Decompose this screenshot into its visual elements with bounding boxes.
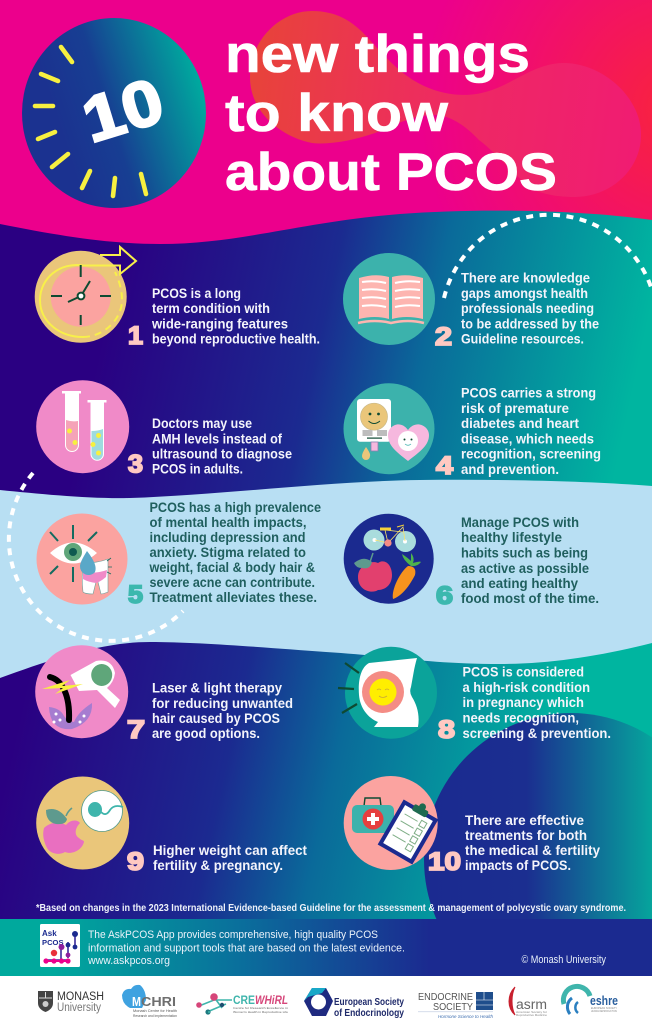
text 8: in pregnancy which	[462, 695, 584, 710]
main gradient background	[0, 211, 652, 925]
text 5: of mental health impacts,	[150, 515, 306, 530]
text 8: a high-risk condition	[462, 680, 590, 695]
text 2	[461, 271, 599, 346]
text 6: Manage PCOS with	[461, 515, 579, 530]
text 8: needs recognition,	[462, 710, 579, 726]
logo: CREWHIRL: Centre for Research Excellence in	[233, 1006, 288, 1010]
text 5: including depression and	[150, 530, 306, 545]
title: new things	[225, 25, 530, 84]
app logo: AskPCOS	[40, 924, 80, 967]
light blue band	[0, 480, 652, 678]
title	[225, 25, 557, 202]
text 7: for reducing unwanted	[152, 696, 293, 711]
text 8	[462, 665, 611, 741]
logo: MCHRI: Monash Centre for Health	[133, 1009, 177, 1013]
logo: ASRM	[509, 987, 548, 1017]
logo: MCHRI: CHRI	[141, 994, 176, 1009]
icon: clock with arrow	[35, 247, 136, 343]
logo: ESHRE: HUMAN REPRODUCTION	[591, 1009, 617, 1013]
text 10: treatments for both	[465, 828, 587, 843]
icon: apple and sperm	[36, 776, 129, 870]
text 2: professionals needing	[461, 301, 594, 316]
text 2: There are knowledge	[461, 271, 590, 286]
text 5: anxiety. Stigma related to	[150, 545, 306, 560]
header background	[0, 0, 652, 250]
logo: Monash University: University	[57, 1002, 101, 1014]
logo: ESHRE	[563, 986, 618, 1014]
logo: Monash University	[38, 991, 104, 1014]
text 9: Higher weight can affect	[153, 843, 308, 858]
text 9	[153, 843, 308, 873]
text 8: PCOS is considered	[462, 665, 584, 680]
text 4: recognition, screening	[461, 446, 601, 462]
icon: medical bag and clipboard	[344, 776, 442, 870]
badge: 10 clock: 10	[74, 64, 172, 156]
number 6: 6	[436, 582, 453, 610]
logo: MCHRI	[122, 985, 177, 1018]
icon: eye, tear and body	[36, 514, 128, 604]
text 6: and eating healthy	[461, 576, 579, 591]
text 1: beyond reproductive health.	[152, 332, 320, 346]
title: about PCOS	[225, 143, 557, 202]
text 6: food most of the time.	[461, 591, 599, 606]
text 1: PCOS is a long	[152, 286, 241, 301]
dashed arc upper right	[444, 215, 652, 298]
app logo: AskPCOS: Ask	[42, 929, 57, 938]
text 5: severe acne can contribute.	[150, 575, 315, 590]
text 6: healthy lifestyle	[461, 530, 562, 545]
logo: European Society of Endocrinology	[304, 988, 404, 1019]
text 4: disease, which needs	[461, 432, 594, 446]
icon: hair dryer laser	[35, 645, 128, 738]
text 6: as active as possible	[461, 561, 589, 576]
logo: CREWHIRL: CRE	[233, 993, 255, 1007]
text 9: fertility & pregnancy.	[153, 858, 283, 873]
text 5	[149, 500, 321, 605]
number 1: 1	[128, 322, 143, 350]
number 3: 3	[128, 451, 143, 479]
number 2: 2	[435, 323, 452, 351]
text 1: wide-ranging features	[151, 316, 288, 332]
logo: European Society of Endocrinology: of Endocrinology	[334, 1007, 404, 1019]
text 10: impacts of PCOS.	[465, 858, 571, 873]
text 3: PCOS in adults.	[152, 462, 243, 476]
copyright: © Monash University	[522, 954, 607, 966]
text 7: hair caused by PCOS	[152, 711, 280, 726]
logo: ASRM: Reproductive Medicine	[516, 1013, 548, 1017]
text 3: AMH levels instead of	[152, 432, 283, 446]
logo: MCHRI: M	[132, 994, 141, 1009]
number 8: 8	[438, 716, 455, 744]
text 4: diabetes and heart	[461, 416, 580, 431]
icon: test tubes	[36, 380, 129, 473]
text 5: weight, facial & body hair &	[149, 560, 315, 575]
logo: European Society of Endocrinology: European Society	[334, 996, 404, 1008]
text 8: screening & prevention.	[462, 726, 611, 741]
text 5: Treatment alleviates these.	[150, 590, 317, 605]
text 4: risk of premature	[461, 401, 569, 416]
text 6: habits such as being	[461, 546, 588, 560]
logo strip background	[0, 976, 652, 1024]
icon: book	[343, 253, 435, 345]
text 2: to be addressed by the	[461, 316, 599, 332]
text 10: the medical & fertility	[465, 843, 601, 858]
logo: CREWHIRL: WHiRL	[255, 993, 288, 1007]
text 1	[151, 286, 320, 346]
logo: ESHRE: eshre	[590, 993, 618, 1008]
number 10: 10	[428, 848, 461, 876]
badge: 10 clock	[22, 18, 206, 208]
icon: glucose meter and heart	[344, 383, 434, 474]
app logo: AskPCOS: PCOS	[42, 938, 64, 947]
logo: Endocrine Society: ENDOCRINE	[418, 992, 473, 1003]
dark circle lower right	[424, 713, 652, 919]
app description	[87, 929, 405, 967]
dashed arc left	[9, 473, 183, 641]
logo: CREWHIRL: Women's Health in Reproductive Life	[233, 1010, 288, 1014]
text 10	[465, 813, 601, 873]
text 6	[461, 515, 599, 606]
text 4	[461, 386, 601, 477]
text 3	[152, 416, 292, 476]
text 7: Laser & light therapy	[152, 681, 283, 696]
logo: ASRM: asrm	[516, 997, 547, 1012]
app description: www.askpcos.org	[87, 955, 170, 967]
app description: information and support tools that are based on the latest evidence.	[88, 942, 405, 954]
text 3: Doctors may use	[152, 416, 252, 431]
text 3: ultrasound to diagnose	[152, 446, 292, 462]
number 4: 4	[436, 452, 453, 480]
text 10: There are effective	[465, 813, 584, 828]
footer band	[0, 919, 652, 976]
text 2: gaps amongst health	[461, 286, 588, 301]
number 5: 5	[128, 581, 143, 609]
logo: Endocrine Society: SOCIETY	[433, 1002, 473, 1013]
app description: The AskPCOS App provides comprehensive, high quality PCOS	[88, 929, 378, 941]
text 7	[152, 681, 293, 741]
text 2: Guideline resources.	[461, 332, 584, 346]
logo: Endocrine Society: Hormone Science to Health	[438, 1014, 494, 1019]
text 5: PCOS has a high prevalence	[150, 500, 321, 515]
logo: Monash University: MONASH	[57, 991, 104, 1003]
logo: CREWHIRL	[196, 993, 288, 1015]
logo: ASRM: American Society for	[516, 1010, 547, 1014]
logo: ESHRE: EUROPEAN SOCIETY	[591, 1006, 617, 1010]
icon: pregnancy	[338, 647, 437, 739]
text 4: PCOS carries a strong	[461, 386, 596, 401]
text 7: are good options.	[152, 726, 260, 741]
icon: bicycle, apple and carrot	[344, 514, 434, 604]
logo: MCHRI: Research and Implementation	[133, 1014, 177, 1018]
text 4: and prevention.	[461, 462, 559, 477]
number 7: 7	[127, 716, 145, 744]
title: to know	[225, 84, 449, 143]
text 1: term condition with	[152, 301, 270, 316]
number 9: 9	[127, 848, 144, 876]
logo: Endocrine Society	[418, 992, 494, 1019]
